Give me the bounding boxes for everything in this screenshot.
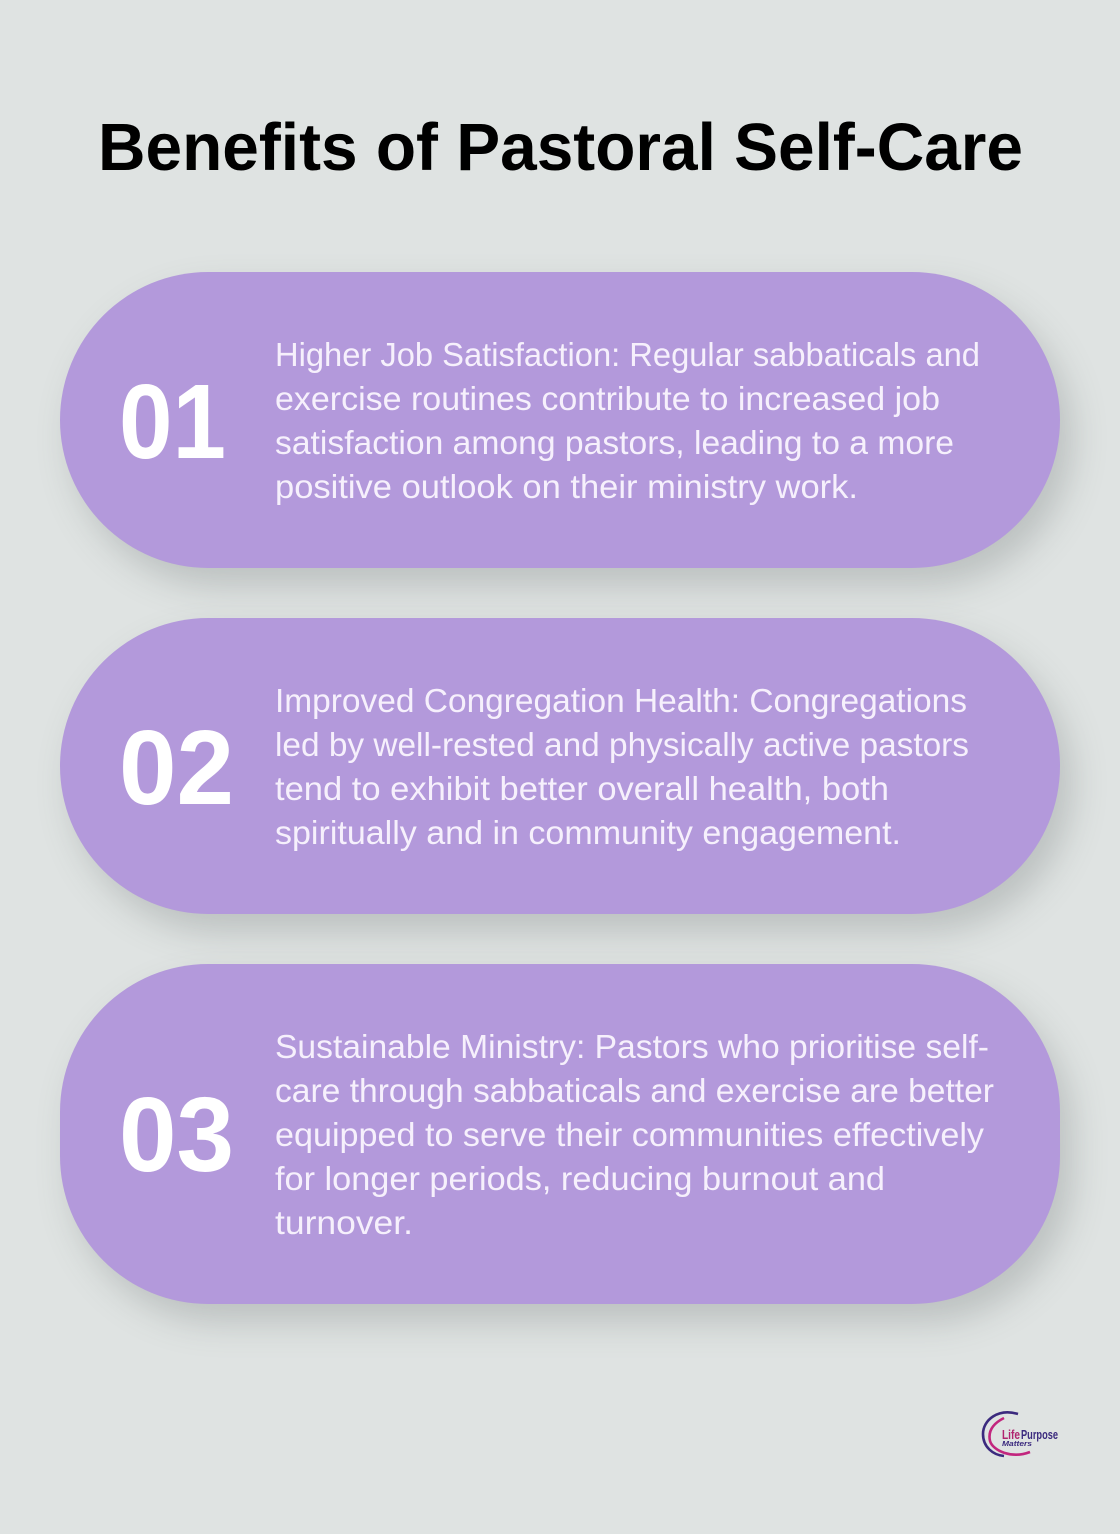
text block: higher job satisfaction: Higher Job Satisfaction: Regular sabbaticals and bbox=[275, 336, 980, 373]
text block: improved congregation health: led by well-rested and physically active pastors bbox=[275, 726, 969, 763]
text block: sustainable ministry: equipped to serve their communities effectively bbox=[275, 1116, 985, 1153]
text block: sustainable ministry: for longer periods, reducing burnout and bbox=[275, 1160, 885, 1197]
text block: improved congregation health: spiritually and in community engagement. bbox=[275, 814, 901, 851]
text block: improved congregation health: tend to exhibit better overall health, both bbox=[275, 770, 889, 807]
text block: sustainable ministry: Sustainable Ministry: Pastors who prioritise self- bbox=[275, 1028, 989, 1065]
panel: card 03 background bbox=[60, 964, 1060, 1304]
text block: sustainable ministry: care through sabbaticals and exercise are better bbox=[275, 1072, 994, 1109]
number 01: 01 bbox=[119, 363, 226, 481]
text block: higher job satisfaction: positive outlook on their ministry work. bbox=[275, 468, 858, 505]
logo: Life Purpose Matters: Purpose bbox=[1021, 1427, 1058, 1442]
title: Benefits of Pastoral Self-Care bbox=[98, 110, 1023, 185]
text block: higher job satisfaction bbox=[275, 336, 980, 505]
text block: higher job satisfaction: satisfaction among pastors, leading to a more bbox=[275, 424, 954, 461]
text block: higher job satisfaction: exercise routines contribute to increased job bbox=[275, 380, 940, 417]
number 03: 03 bbox=[119, 1076, 234, 1194]
text block: sustainable ministry: turnover. bbox=[275, 1204, 413, 1241]
panel: card 02 background bbox=[60, 618, 1060, 914]
panel: card 01 background bbox=[60, 272, 1060, 568]
logo: Life Purpose Matters bbox=[983, 1412, 1058, 1456]
logo: Life Purpose Matters: Life bbox=[1002, 1427, 1020, 1442]
number 02: 02 bbox=[119, 709, 234, 827]
text block: improved congregation health bbox=[275, 682, 969, 851]
logo: Life Purpose Matters: Matters bbox=[1002, 1441, 1032, 1448]
text block: sustainable ministry bbox=[275, 1028, 994, 1241]
text block: improved congregation health: Improved Congregation Health: Congregations bbox=[275, 682, 967, 719]
